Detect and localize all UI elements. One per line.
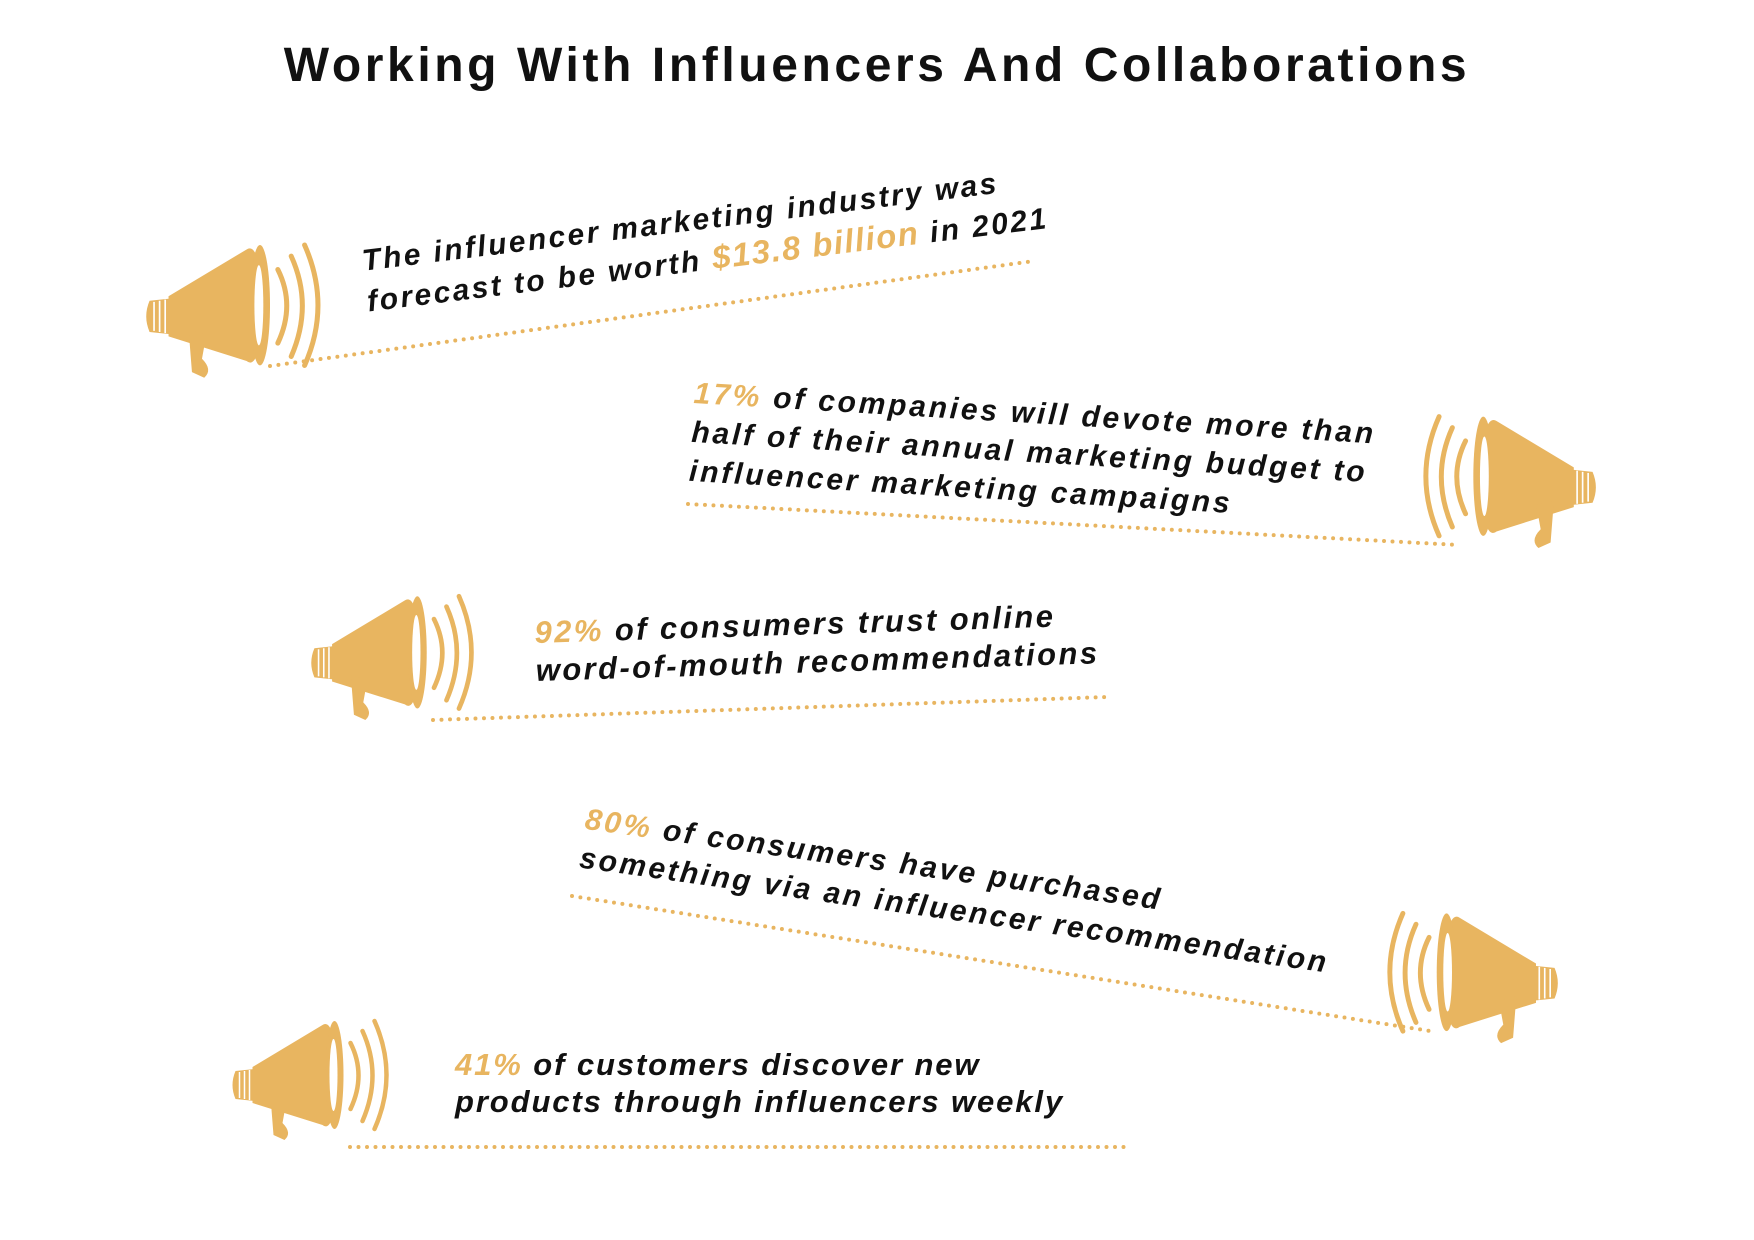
dotted line 3 <box>433 697 1107 720</box>
icon: megaphone 1 <box>146 242 320 378</box>
text block 2: 17% of companies will devote more than <box>693 377 1377 450</box>
text block 4: 80% of consumers have purchased <box>583 803 1164 917</box>
text block 2: half of their annual marketing budget to <box>691 416 1368 489</box>
text block 2 <box>688 377 1377 520</box>
icon: megaphone 4 <box>1387 910 1558 1044</box>
title: Working With Influencers And Collaborations <box>284 39 1470 92</box>
text block 1: forecast to be worth $13.8 billion in 2021 <box>365 202 1050 318</box>
text block 5: 41% of customers discover new <box>455 1047 980 1082</box>
text block 3: word-of-mouth recommendations <box>535 635 1100 688</box>
text block 3: 92% of consumers trust online <box>534 599 1056 650</box>
dotted line 1 <box>270 261 1034 366</box>
text block 3 <box>534 599 1100 688</box>
text block 4: something via an influencer recommendation <box>578 842 1331 979</box>
dotted line 5 <box>350 1145 1124 1149</box>
icon: megaphone 3 <box>311 594 474 720</box>
dotted line 2 <box>688 504 1459 545</box>
text block 5: products through influencers weekly <box>455 1084 1064 1119</box>
text block 5 <box>454 1047 1064 1119</box>
text block 2: influencer marketing campaigns <box>688 455 1233 520</box>
text block 1: The influencer marketing industry was <box>360 167 1001 278</box>
icon: megaphone 2 <box>1423 414 1596 548</box>
icon: megaphone 5 <box>232 1018 389 1140</box>
dotted line 4 <box>572 896 1430 1031</box>
